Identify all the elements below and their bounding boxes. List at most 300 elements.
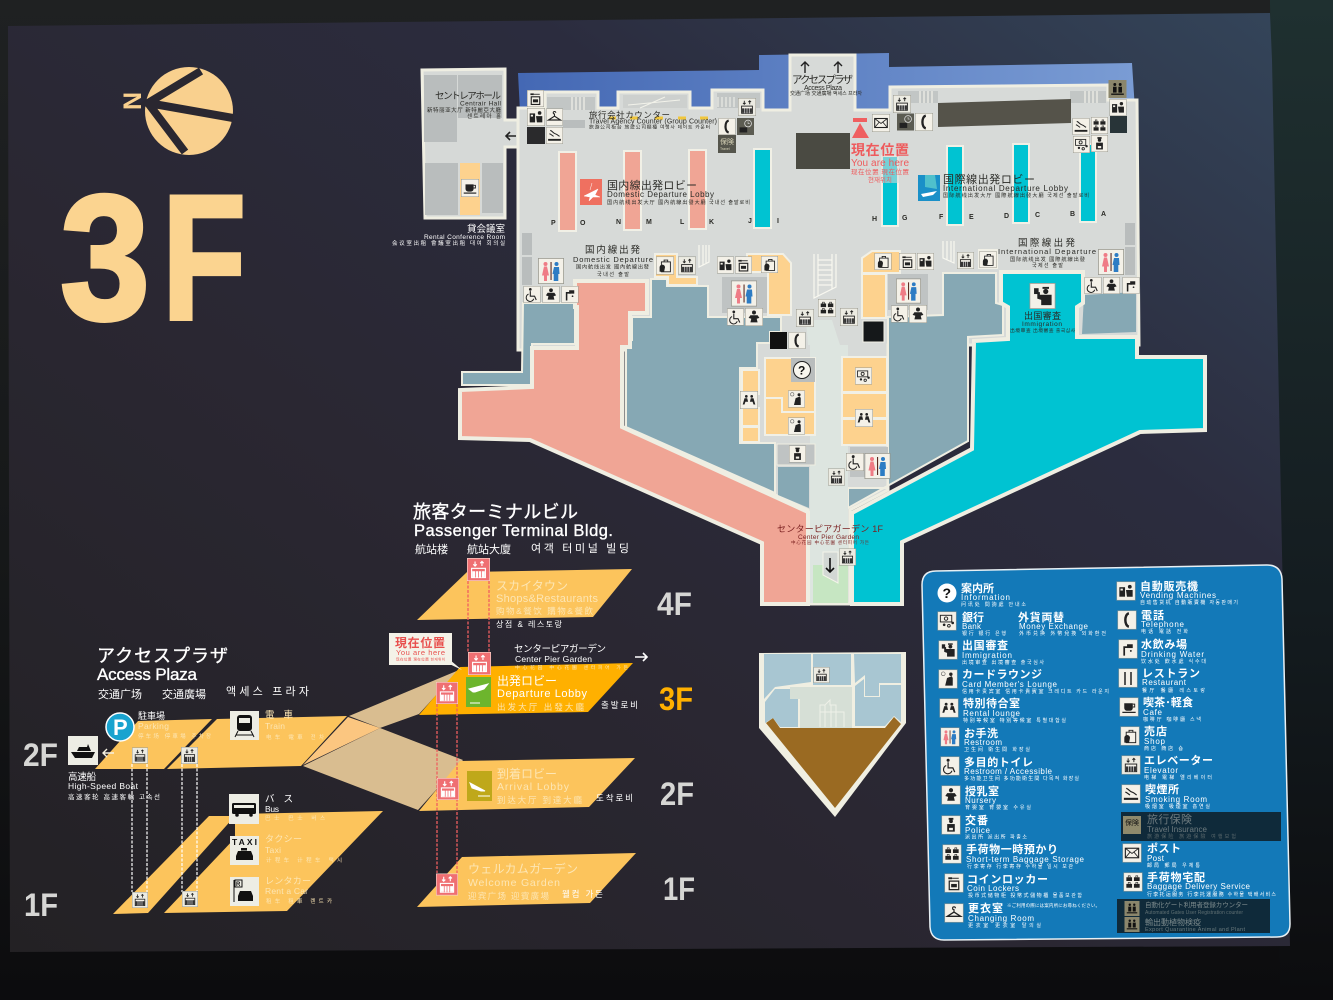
plates: Access Plaza 1F: [113, 811, 383, 914]
labels: gate letters: C: [1035, 212, 1040, 219]
gray areas: top service blocks: [522, 91, 1135, 313]
icon: arrivals: [467, 771, 492, 801]
icon: elevator 4F: [467, 558, 490, 581]
labels: gate letters: K: [709, 219, 714, 226]
legend: coin lockers: コインロッカー: [967, 873, 1048, 886]
icon: card lounge: [788, 418, 805, 434]
floor plate: 1F welcome garden: [417, 853, 636, 907]
icon: elevator: [893, 95, 911, 113]
label: Centrair Hall: セントレアホール: [435, 91, 501, 102]
icon: accessible: [891, 306, 908, 322]
legend: export quarantine: Export Quarantine Animal and Plant: [1145, 927, 1245, 933]
floor plate: 1F welcome garden: ウェルカムガーデン: [468, 861, 578, 876]
icon: knife and fork: [1119, 669, 1137, 687]
legend: restroom: Restroom: [964, 738, 1002, 747]
floor plate: 4F shops and restaurants: Shops&Restaurants: [496, 593, 598, 605]
pier: domestic (pink): [460, 281, 808, 604]
label: Domestic Departure: Domestic Departure: [573, 255, 653, 264]
label: International Departure: 국제선 출발: [1032, 261, 1063, 269]
floor plate: 2F arrival lobby: 도착로비: [596, 793, 633, 803]
label: high-speed boat: High-Speed Boat: [68, 781, 139, 791]
label: bus: [265, 794, 325, 822]
label: Center Pier Garden: センターピアガーデン 1F: [777, 523, 884, 534]
icon: elevator: [796, 309, 814, 327]
floor number: 3F: [60, 158, 246, 357]
legend: accessible restroom: Restroom / Accessible: [964, 767, 1053, 776]
legend: card lounge: [939, 668, 1109, 695]
legend: nursery: Nursery: [965, 796, 996, 805]
legend: changing room: ※ご利用の際には案内所にお尋ねください。: [1007, 902, 1100, 909]
legend: short-term baggage: [943, 842, 1085, 870]
icon: accessible: [1085, 277, 1101, 294]
legend: shop: [1121, 724, 1183, 752]
legend: automated gates: 自動化ゲート利用者登録カウンター: [1145, 900, 1248, 909]
diagram: Passenger Terminal Bldg title: 여객 터미널 빌딩: [531, 542, 629, 555]
legend: accessible restroom: 多目的トイレ: [964, 755, 1033, 769]
legend: travel insurance: Travel Insurance: [1147, 825, 1208, 834]
legend: information: 案内所: [961, 581, 994, 595]
label: International Departure: [998, 237, 1096, 269]
label: Travel Agency Counter: [589, 110, 717, 130]
floor labels: Access Plaza: 1F: [24, 887, 58, 923]
floor plate: 2F arrival lobby: [419, 758, 635, 811]
legend: restroom: 卫生间 衛生間 화장실: [964, 746, 1030, 753]
label: taxi: Taxi: [265, 845, 281, 855]
legend: export quarantine: 輸出動植物検疫: [1145, 917, 1201, 927]
legend: bank and exchange: [938, 610, 1106, 637]
legend: information: [938, 581, 1026, 608]
label: Domestic Departure: 国内航线出发 國內航線出發: [576, 262, 649, 270]
labels: gate letters: J: [748, 218, 752, 225]
floor labels: terminal: 2F: [660, 776, 694, 812]
stairs: central: [699, 241, 954, 298]
diagram: Access Plaza title: Access Plaza: [97, 665, 198, 684]
marker: you are here: [850, 118, 910, 184]
legend: card lounge: カードラウンジ: [962, 668, 1042, 681]
label: Rental Conference Room: 会议室出租 會議室出租 대여 회의실: [392, 239, 505, 247]
legend: short-term baggage: Short-term Baggage Storage: [966, 855, 1085, 864]
legend: restaurant: Restaurant: [1142, 678, 1187, 687]
floor plate: 1F welcome garden: 迎宾广场 迎賓廣場: [468, 891, 549, 901]
legend: smoking room: [1122, 783, 1210, 810]
icon: coin lockers: [527, 90, 544, 107]
label: Travel Agency Counter: 旅行会社カウンター: [589, 110, 670, 120]
legend: elevator: 电梯 電梯 엘리베이터: [1144, 774, 1212, 781]
legend: bank and exchange: 銀行: [962, 610, 984, 624]
floor plate: 2F arrival lobby: Arrival Lobby: [497, 781, 570, 793]
label: high-speed boat: [68, 771, 160, 801]
legend: information: 问讯处 問詢處 안내소: [961, 601, 1026, 608]
label: Immigration: 出国審査: [1024, 310, 1061, 321]
legend: travel insurance: 旅游保险 旅遊保險 여행보험: [1147, 833, 1236, 840]
legend: elevator: Elevator: [1144, 766, 1178, 775]
floor labels: Access Plaza: 2F: [23, 737, 58, 773]
legend: short-term baggage: 行李寄存 行李寄存 수하물 일시 보관: [967, 863, 1073, 870]
icon: post: [872, 114, 890, 132]
label: Domestic Departure: [573, 244, 653, 278]
icon: bus: [229, 794, 259, 824]
label: parking: [138, 710, 211, 740]
panel: legend: [922, 565, 1290, 940]
legend: cafe: Cafe: [1143, 708, 1163, 717]
legend: drinking water: 饮水处 飲水處 식수대: [1141, 658, 1206, 665]
icon: closed panel: [863, 321, 884, 342]
legend: export quarantine: [1124, 917, 1245, 933]
floor: concourse base: [518, 55, 1139, 604]
label: International Departure Lobby: International Departure Lobby: [943, 184, 1068, 193]
icon: elevator: [132, 748, 148, 763]
icon: restroom: [896, 279, 921, 303]
icon: rental lounge: [855, 409, 873, 427]
label: bus: 巴士 巴士 버스: [265, 814, 325, 822]
legend: restaurant: [1119, 667, 1205, 694]
diagram: Passenger Terminal Bldg title: 航站大廈: [467, 542, 511, 556]
floor plate: 4F shops and restaurants: スカイタウン: [496, 579, 568, 593]
legend: telephone: 电话 電話 전화: [1141, 628, 1188, 635]
label: Center Pier Garden: 中心花园 中心花園 센터피어 가든: [791, 539, 869, 546]
floor plate: 4F shops and restaurants: 상점 & 레스토랑: [496, 619, 563, 629]
legend: changing room: [945, 901, 1100, 929]
icon: closed service: [527, 127, 545, 144]
icon: insurance: 保険: [720, 137, 734, 146]
label: taxi: タクシー: [265, 834, 302, 844]
arrow: to boat: [103, 749, 114, 757]
labels: gate letters: H: [872, 216, 877, 223]
icon: shop: [656, 257, 674, 274]
label: high-speed boat: 高速客轮 高速客輪 고속선: [68, 792, 160, 801]
legend: immigration: 出国審査: [962, 638, 1008, 652]
icon: restroom: [731, 281, 757, 306]
icon: card lounge: [788, 391, 805, 407]
floor labels: Access Plaza: [23, 737, 58, 923]
icon: elevator: [182, 891, 198, 907]
legend: post: 邮局 郵局 우체통: [1147, 862, 1200, 869]
label: bus: バ ス: [265, 794, 293, 805]
floor plate: 1F welcome garden: Welcome Garden: [468, 877, 560, 889]
legend: shop: Shop: [1144, 737, 1166, 746]
floor plate: 2F arrival lobby: 到达大厅 到達大廳: [497, 795, 582, 805]
labels: gate letters: B: [1070, 211, 1075, 218]
icon: coin lockers: [899, 253, 916, 270]
block: insurance background: [1121, 812, 1281, 841]
callout: you are here: You are here: [396, 648, 445, 657]
icon: clock service: [737, 118, 754, 135]
marker: you are here: 现在位置 現在位置: [851, 167, 910, 176]
icon: high-speed boat: [68, 736, 98, 765]
floor plan: main terminal 3F: [392, 53, 1205, 604]
label: Center Pier Garden: Center Pier Garden: [798, 534, 859, 541]
legend: telephone: 電話: [1141, 608, 1164, 622]
icon: vending: [917, 253, 934, 270]
label: International Departure: 国際線出発: [1018, 237, 1075, 249]
icon: bank: [1073, 136, 1090, 153]
legend: telephone: Telephone: [1141, 620, 1185, 629]
legend: bank and exchange: Money Exchange: [1019, 622, 1089, 631]
floor labels: terminal: 1F: [663, 871, 695, 907]
icon: rental lounge: [740, 391, 758, 409]
legend: travel insurance: [1123, 812, 1236, 840]
icon: telephone: [915, 113, 933, 131]
legend: card lounge: Card Member's Lounge: [962, 680, 1058, 689]
legend: immigration: [939, 638, 1044, 666]
label: Immigration: 出境审查 出境審查 출국심사: [1010, 327, 1076, 334]
legend: cafe: [1120, 695, 1201, 723]
legend: card lounge: 信用卡贵宾室 信用卡貴賓室 크레디트 카드 라운지: [962, 688, 1109, 695]
legend: immigration: Immigration: [962, 651, 1012, 660]
label: parking: Parking: [138, 721, 169, 731]
labels: gate letters: I: [777, 218, 779, 225]
diagram: Passenger Terminal Bldg title: 航站楼: [415, 542, 448, 556]
room: Centrair Hall: [422, 69, 520, 218]
callout: you are here: [389, 633, 462, 670]
arrow: to Centrair Hall: [506, 132, 516, 140]
icon: insurance: Travel: [720, 147, 730, 151]
corridor: counter markers: [609, 116, 708, 120]
icon: vending: [717, 257, 734, 273]
icon: smoking: [546, 127, 563, 144]
labels: gate letters: A: [1101, 211, 1106, 218]
legend: rental lounge: Rental lounge: [963, 709, 1021, 718]
diagram: connectors between Access Plaza and terminal: [303, 670, 463, 810]
icon: immigration: [1030, 283, 1055, 309]
icon: elevator: [181, 747, 198, 764]
labels: gate letters: L: [680, 219, 685, 226]
icon: baggage: [818, 299, 836, 317]
label: Centrair Hall: [427, 91, 502, 120]
icon: bank: [855, 368, 872, 384]
block: inactive services background: [1117, 899, 1270, 933]
label: Rental Conference Room: 貸会議室: [467, 223, 505, 235]
icon: nursery: [909, 305, 927, 323]
diagram: Passenger Terminal Bldg title: [413, 502, 629, 556]
shops: orange units: [655, 250, 997, 445]
dark panels: central walls: [796, 99, 1071, 169]
legend: bank and exchange: 外币兑换 外幣兌換 외화환전: [1019, 630, 1106, 637]
plates: Access Plaza 2F: [95, 716, 347, 769]
floor plate: 3F departure lobby: 出发大厅 出發大廳: [497, 702, 584, 712]
diagram: Access Plaza title: 액세스 프라자: [226, 685, 309, 698]
label: Access Plaza: 交通广场 交通廣場 액세스 프라자: [790, 90, 862, 97]
icon: domestic lobby plane: [580, 179, 602, 205]
legend: automated gates: [1124, 900, 1248, 916]
icon: shop: [761, 256, 778, 273]
legend: accessible restroom: 多功能卫生间 多功能衛生間 다목적 화장실: [964, 775, 1079, 782]
label: rent a car: 租车 租車 렌트카: [266, 897, 332, 905]
floor plate: 3F departure lobby: [419, 663, 638, 715]
arrow: Access Plaza left: [801, 62, 809, 73]
label: Domestic Departure Lobby: Domestic Departure Lobby: [607, 190, 714, 199]
callout: you are here: 現在位置: [395, 635, 445, 650]
legend: baggage delivery: 手荷物宅配: [1147, 870, 1205, 884]
label: International Departure: International Departure: [998, 247, 1096, 256]
icon: information: [794, 362, 810, 378]
icon: telephone: [789, 332, 805, 349]
icon: elevator: [678, 257, 696, 274]
icon: parking: [106, 713, 134, 741]
compass: north arrow: [119, 67, 233, 155]
labels: gate letters: [551, 211, 1106, 227]
label: Center Pier Garden: [777, 523, 884, 546]
labels: gate letters: O: [580, 220, 586, 227]
diagram: Access Plaza title: 交通廣場: [162, 687, 206, 701]
legend: information: Information: [961, 593, 1010, 602]
icon: insurance: 保険: [1125, 818, 1139, 827]
legend: post: Post: [1147, 854, 1165, 863]
icon: elevator: [839, 549, 856, 565]
icon: telephone: [719, 118, 735, 135]
icon: rent a car: [230, 877, 259, 906]
legend: bank and exchange: Bank: [962, 622, 982, 631]
label: Centrair Hall: Centrair Hall: [460, 100, 502, 108]
diagram: Access Plaza title: アクセスプラザ: [97, 646, 228, 666]
label: Domestic Departure Lobby: 国内航线出发大厅 國內航線出發大廳 국내선 출발로비: [607, 198, 750, 206]
labels: gate letters: M: [646, 219, 652, 226]
icon: nursery: [1103, 277, 1120, 294]
marker: you are here: You are here: [851, 158, 909, 169]
icon: elevator: [840, 308, 858, 326]
icon: smoking: [1073, 118, 1089, 135]
floor plate: 4F shops and restaurants: [417, 569, 632, 629]
label: Rental Conference Room: [392, 223, 505, 247]
label: Center Pier Garden 3F link: センターピアガーデン: [514, 643, 606, 655]
label: bus: Bus: [265, 804, 279, 814]
legend: travel insurance: 旅行保険: [1147, 812, 1192, 826]
icon: elevator 2F: [437, 778, 459, 800]
label: Access Plaza: [790, 74, 862, 97]
legend: coin lockers: Coin Lockers: [967, 884, 1019, 893]
icon: restroom: [1098, 249, 1124, 275]
legend: police: 派出所 派出所 파출소: [965, 834, 1027, 840]
legend: rental lounge: [940, 696, 1066, 724]
label: Domestic Departure Lobby: 国内線出発ロビー: [607, 178, 697, 192]
corridor: central spine: [806, 320, 848, 603]
arrow: to Center Pier Garden: [635, 653, 647, 661]
bars: boarding gates: [559, 144, 1096, 231]
icon: baggage: [1091, 117, 1108, 134]
icon: elevator: [132, 892, 148, 908]
icon: cafe: [461, 179, 479, 197]
label: train: [265, 709, 324, 741]
legend: nursery: 育婴室 育嬰室 수유실: [965, 804, 1031, 811]
links: white dashes: [132, 764, 197, 892]
label: taxi: 计程车 计程车 택시: [266, 856, 342, 864]
label: high-speed boat: 高速船: [68, 771, 96, 783]
legend: short-term baggage: 手荷物一時預かり: [966, 842, 1058, 856]
legend: baggage delivery: Baggage Delivery Service: [1147, 882, 1251, 891]
legend: nursery: [942, 784, 1031, 811]
label: taxi: [265, 834, 342, 864]
label: International Departure Lobby: 国際線出発ロビー: [943, 172, 1035, 186]
icon: departures: [466, 677, 491, 707]
legend: police: Police: [965, 826, 991, 835]
legend: changing room: 更衣室: [968, 901, 1003, 915]
icon: drinking water: [1123, 277, 1139, 294]
legend: smoking room: 喫煙所: [1145, 783, 1179, 796]
compass: north arrow: N: [119, 92, 147, 110]
floor plate: 1F welcome garden: 웰컴 가든: [562, 889, 603, 899]
units: info and police: [766, 358, 888, 477]
label: train: 电车 電車 전차: [266, 733, 324, 741]
icon: vending: [527, 108, 545, 126]
label: Domestic Departure: 国内線出発: [585, 244, 640, 256]
icon: shop: [875, 253, 891, 270]
legend: immigration: 出境审查 出境審查 출국심사: [962, 659, 1044, 666]
legend: shop: 商店 商店 숍: [1144, 745, 1183, 752]
icon: train: [230, 711, 259, 740]
labels: gate letters: G: [902, 215, 908, 222]
legend: automated gates: Automated Gates User Registration counter: [1145, 910, 1243, 916]
icon: taxi: [230, 836, 259, 865]
label: Domestic Departure Lobby: [607, 178, 750, 206]
floor labels: terminal: [657, 586, 695, 907]
label: Travel Agency Counter: 旅游公司柜台 旅遊公司櫃檯 여행사 데이트 카운터: [589, 124, 710, 130]
icon: restroom: [865, 453, 890, 479]
legend: restaurant: 餐厅 餐廳 레스토랑: [1142, 687, 1205, 694]
icon: changing room: [546, 109, 563, 125]
icon: insurance: [718, 135, 736, 153]
icon: police: [789, 446, 806, 462]
label: Rental Conference Room: Rental Conference Room: [424, 234, 505, 241]
legend: accessible restroom: [941, 755, 1079, 782]
label: rent a car: Rent a Car: [265, 886, 308, 896]
arrow: Access Plaza right: [834, 62, 842, 73]
legend: rental lounge: 特别等候室 特別等候室 특별대합실: [963, 717, 1066, 724]
legend: post: [1123, 842, 1200, 869]
icon: international lobby plane: [918, 175, 940, 201]
icon: shop: [980, 251, 996, 268]
icon: taxi: TAXI: [232, 837, 257, 847]
icon: accessible: [524, 286, 540, 303]
marker: you are here: 現在位置: [851, 142, 909, 158]
legend: baggage delivery: [1124, 870, 1276, 898]
label: rent a car: レンタカー: [265, 876, 311, 886]
diagram: Passenger Terminal Bldg title: 旅客ターミナルビル: [413, 502, 578, 522]
label: parking: 停车场 停車場 주차장: [138, 732, 211, 740]
icon: nursery: [543, 286, 559, 303]
legend: drinking water: [1119, 637, 1206, 665]
icon: closed service: [770, 332, 787, 349]
icon: clock service: [897, 114, 914, 130]
label: Immigration: [1010, 310, 1076, 334]
legend: changing room: 更衣室 更衣室 탈의실: [968, 922, 1041, 929]
labels: gate letters: E: [969, 214, 974, 221]
label: parking: 駐車場: [138, 710, 165, 721]
legend: bank and exchange: 外貨両替: [1018, 610, 1064, 624]
gray-blue: centre-right apron: [848, 273, 1003, 508]
icon: elevator: [828, 469, 845, 485]
label: Center Pier Garden 3F link: Center Pier Garden: [515, 654, 592, 664]
icon: accessible: [846, 453, 864, 471]
label: Domestic Departure: 국내선 출발: [597, 270, 629, 278]
legend: telephone: [1118, 608, 1188, 635]
label: Immigration: Immigration: [1022, 321, 1062, 328]
label: train: 電 車: [265, 709, 293, 721]
icon: parking: P: [113, 715, 128, 740]
floor labels: terminal: 3F: [659, 681, 693, 717]
elevator links: red dashes: [437, 581, 489, 873]
floor plate: 3F departure lobby: Departure Lobby: [497, 688, 588, 700]
label: International Departure: 国际航线出发 國際航線出發: [1010, 255, 1085, 263]
legend: drinking water: Drinking Water: [1141, 650, 1204, 659]
inset map: lower floor: [759, 652, 906, 817]
legend: baggage delivery: 行李托运服务 行李托運服務 수하물 택배서비스: [1147, 891, 1276, 898]
legend: nursery: 授乳室: [965, 784, 999, 798]
floor plate: 4F shops and restaurants: 购物&餐饮 購物&餐飲: [496, 606, 593, 616]
label: train: Train: [265, 721, 285, 731]
legend: elevator: エレベーター: [1144, 754, 1213, 767]
floor plate: 3F departure lobby: 出発ロビー: [497, 674, 557, 688]
icon: elevator: [957, 252, 974, 269]
